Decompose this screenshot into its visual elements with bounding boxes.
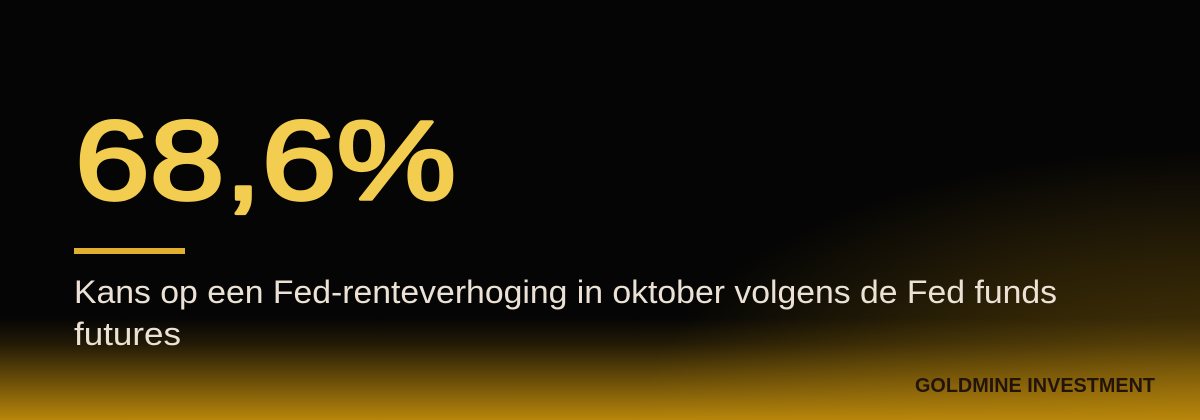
headline percentage: 68,6% — [75, 98, 456, 223]
description text: futures — [74, 316, 181, 352]
description text — [74, 274, 1057, 352]
accent divider — [74, 248, 185, 254]
description text: Kans op een Fed-renteverhoging in oktober volgens de Fed funds — [74, 274, 1057, 310]
brand label: GOLDMINE INVESTMENT — [915, 374, 1155, 397]
